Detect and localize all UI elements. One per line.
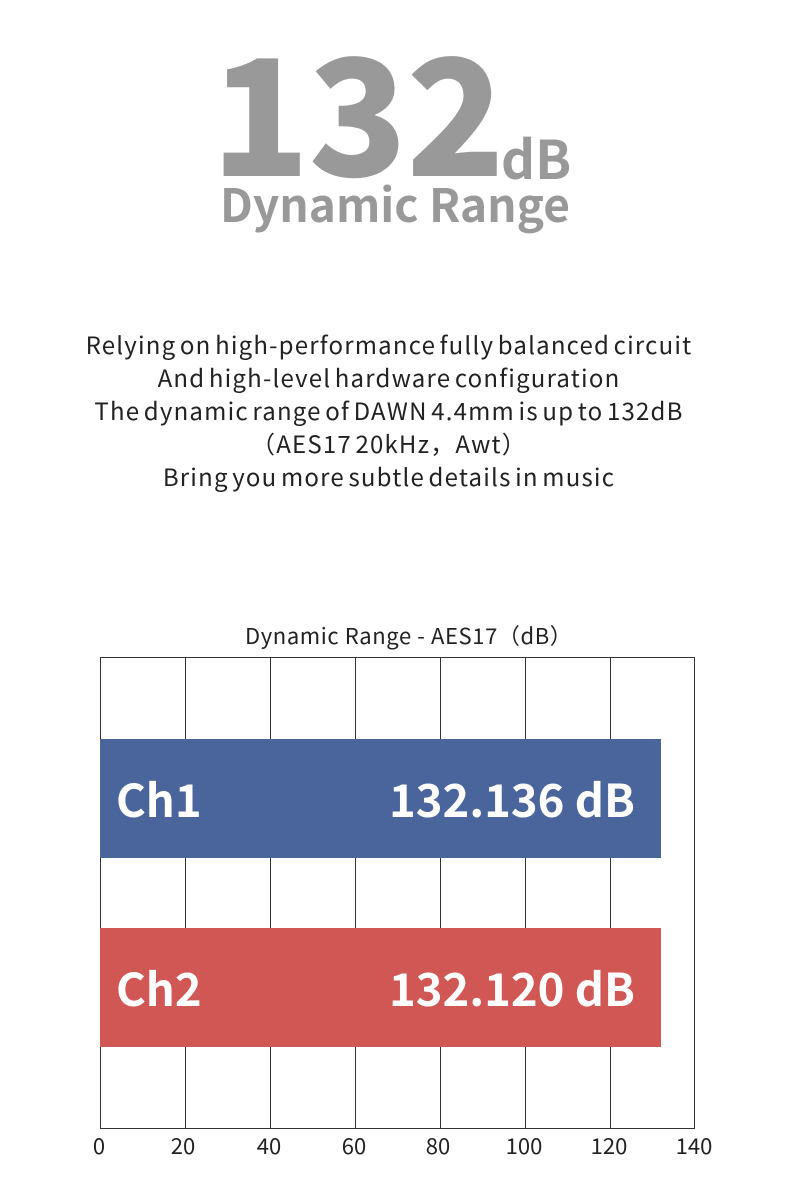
bar: Ch1 xyxy=(100,739,661,858)
x axis labels: 140 xyxy=(676,1129,712,1161)
plot frame and grid xyxy=(100,657,695,1129)
x axis labels: 40 xyxy=(257,1129,281,1161)
x axis labels: 60 xyxy=(342,1129,366,1161)
bar: Ch2: Ch2 xyxy=(116,954,202,1020)
chart title: Dynamic Range - AES17（dB） xyxy=(245,619,572,651)
bar: Ch2 xyxy=(100,928,661,1047)
description text block xyxy=(86,326,692,493)
subtitle: Dynamic Range: Dynamic Range xyxy=(220,170,570,236)
bar chart xyxy=(93,657,712,1161)
x axis labels: 0 xyxy=(93,1129,105,1161)
title: 132dB: dB xyxy=(501,119,571,195)
description text block: Bring you more subtle details in music xyxy=(163,458,615,493)
description text block: Relying on high-performance fully balanced circuit xyxy=(86,326,692,361)
bar: Ch1: 132.136 dB xyxy=(389,765,635,831)
description text block: （AES17 20kHz，Awt） xyxy=(251,425,527,460)
x axis labels: 100 xyxy=(506,1129,542,1161)
bar: Ch1: Ch1 xyxy=(116,765,202,831)
description text block: And high-level hardware configuration xyxy=(158,359,620,394)
bar: Ch2: 132.120 dB xyxy=(389,954,635,1020)
x axis labels xyxy=(93,1129,712,1161)
x axis labels: 120 xyxy=(591,1129,627,1161)
description text block: The dynamic range of DAWN 4.4mm is up to 132dB xyxy=(94,392,684,427)
x axis labels: 80 xyxy=(426,1129,450,1161)
x axis labels: 20 xyxy=(171,1129,195,1161)
